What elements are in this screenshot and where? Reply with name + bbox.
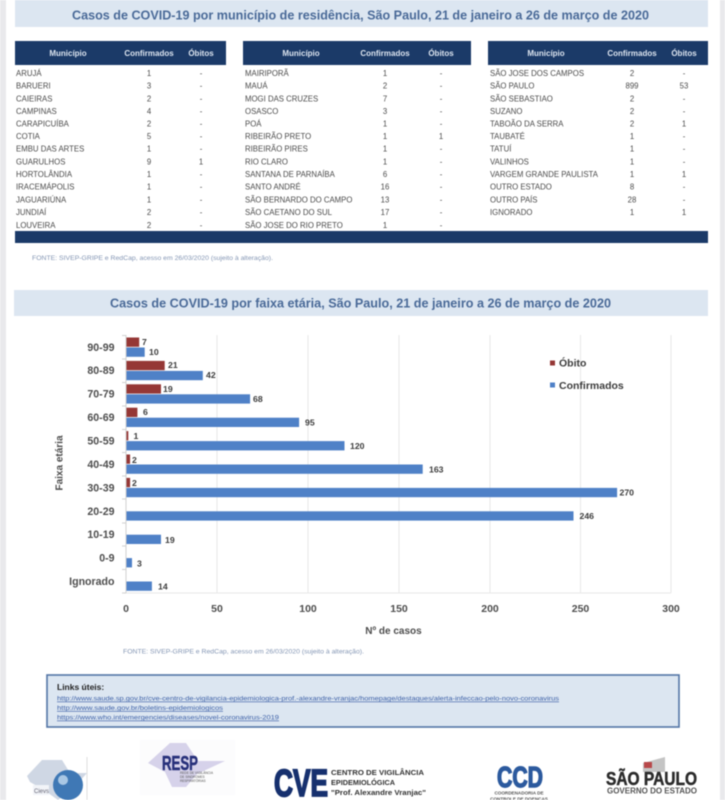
age group labels: 20-29	[87, 506, 115, 518]
table column 2: -	[440, 196, 443, 204]
heading: cases by age group	[14, 290, 708, 316]
table column 2: SÃO BERNARDO DO CAMPO	[245, 196, 352, 204]
table column 3: Confirmados	[607, 49, 657, 58]
table column 2: Confirmados	[360, 49, 410, 58]
table column 1: -	[200, 132, 203, 141]
table column 2: 2	[383, 82, 387, 90]
table column 1: -	[200, 170, 203, 179]
logo: CVE: "Prof. Alexandre Vranjac"	[331, 788, 426, 797]
table column 3: 2	[630, 69, 634, 78]
table column 1: -	[200, 221, 203, 230]
table column 1: 9	[147, 158, 151, 166]
table column 1: Confirmados	[124, 49, 174, 58]
data labels: 68	[253, 394, 263, 404]
bars: Óbito	[126, 338, 165, 487]
table column 2: RIBEIRÃO PIRES	[245, 144, 308, 154]
table column 3: VALINHOS	[490, 158, 529, 166]
table column 2: RIBEIRÃO PRETO	[245, 132, 311, 141]
table column 1: -	[200, 69, 203, 78]
table column 1: -	[200, 82, 203, 90]
bars: Confirmados	[126, 348, 617, 591]
table column 3	[488, 41, 708, 217]
table column 2: -	[440, 182, 443, 192]
table column 2: MOGI DAS CRUZES	[245, 94, 318, 104]
table column 1: -	[200, 107, 203, 116]
table column 1: IRACEMÁPOLIS	[16, 182, 74, 192]
logo: CCD	[490, 762, 548, 800]
table column 2: -	[440, 94, 443, 104]
table column 3: -	[683, 144, 686, 154]
table column 3: TABOÃO DA SERRA	[490, 120, 564, 128]
logo: Governo de São Paulo	[606, 757, 697, 796]
table column 3: VARGEM GRANDE PAULISTA	[490, 170, 599, 179]
link list: http://www.saude.sp.gov.br/cve-centro-de-vigilancia-epidemiologica-prof.-alexandre-vranjac/homepage/destaques/alerta-infeccao-pelo-novo-coronavirus	[57, 696, 559, 702]
data labels: 14	[158, 582, 168, 592]
table column 2: RIO CLARO	[245, 158, 288, 166]
table column 1: 1	[147, 170, 151, 179]
table column 1: 2	[147, 120, 151, 128]
logo: RESP: RESP	[162, 753, 198, 775]
table column 2: 1	[383, 144, 387, 154]
table column 1: 2	[147, 221, 151, 230]
source note: table: FONTE: SIVEP-GRIPE e RedCap, acesso em 26/03/2020 (sujeito à alteração).	[32, 256, 273, 262]
table column 2: SÃO JOSE DO RIO PRETO	[245, 221, 343, 230]
table column 1	[15, 41, 226, 230]
table column 3: 2	[630, 120, 634, 128]
table column 1: CARAPICUÍBA	[16, 120, 70, 128]
table column 2: 1	[383, 221, 387, 230]
table column 2: 1	[383, 158, 387, 166]
data labels: 7	[142, 337, 147, 347]
link list: http://www.saude.gov.br/boletins-epidemiologicos	[57, 705, 223, 712]
table column 2: -	[440, 158, 443, 166]
age group labels: 40-49	[87, 459, 115, 471]
table column 3: 1	[682, 120, 686, 128]
table column 3: 1	[682, 170, 686, 179]
age group labels	[69, 342, 115, 588]
table column 2: Município	[282, 49, 320, 58]
table column 2: MAIRIPORÃ	[245, 69, 290, 78]
age group labels: 80-89	[87, 365, 115, 377]
table column 1: 2	[147, 208, 151, 217]
table column 3: -	[683, 132, 686, 141]
table column 2: 7	[383, 94, 387, 104]
table column 1: GUARULHOS	[16, 158, 65, 166]
links heading: Links úteis:	[57, 682, 104, 692]
data labels: 19	[163, 384, 173, 394]
data labels: 3	[137, 558, 142, 568]
table column 2: 1	[383, 120, 387, 128]
table column 2: 13	[381, 196, 389, 204]
table column 3: -	[683, 182, 686, 192]
table column 3: 2	[630, 107, 634, 116]
data labels: 270	[620, 488, 634, 498]
table column 3: Município	[527, 49, 565, 58]
logo row	[27, 740, 697, 800]
link list: https://www.who.int/emergencies/diseases/novel-coronavirus-2019	[57, 714, 280, 722]
table column 3: 1	[630, 132, 634, 141]
bar chart	[54, 335, 680, 637]
logo: CVE: CENTRO DE VIGILÂNCIA	[331, 768, 425, 777]
logo: RESP: REDE DE VIGILÂNCIA	[180, 771, 214, 775]
table column 1: JUNDIAÍ	[16, 208, 47, 217]
table column 2: 3	[383, 107, 387, 116]
table column 2: 6	[383, 170, 387, 179]
table column 3: 899	[625, 82, 639, 90]
table column 1: COTIA	[16, 132, 41, 141]
heading: cases by age group: Casos de COVID-19 por faixa etária, São Paulo, 21 de janeiro a 26 de março de 2020	[110, 296, 611, 310]
age group labels: 0-9	[99, 552, 115, 564]
source note: chart: FONTE: SIVEP-GRIPE e RedCap, acesso em 26/03/2020 (sujeito à alteração).	[123, 650, 364, 656]
heading: cases by municipality: Casos de COVID-19 por município de residência, São Paulo, 21 de janeiro a 26 de março de 2020	[72, 8, 649, 22]
data labels: 95	[305, 418, 315, 428]
data labels: 21	[168, 360, 178, 370]
panel: age group chart section	[14, 290, 708, 656]
legend: Confirmados	[559, 380, 624, 392]
table column 1: -	[200, 120, 203, 128]
table column 1: -	[200, 94, 203, 104]
x axis tick labels: 300	[662, 603, 680, 615]
logo: Governo de São Paulo: GOVERNO DO ESTADO	[607, 786, 697, 796]
table column 1: 3	[147, 82, 151, 90]
link list	[57, 696, 559, 722]
x axis tick labels: 100	[299, 603, 317, 615]
table column 2: MAUÁ	[245, 82, 268, 90]
table column 2: -	[440, 82, 443, 90]
data labels: 6	[143, 407, 148, 417]
table column 2	[243, 41, 471, 230]
table column 1: 1	[147, 144, 151, 154]
table column 1: HORTOLÂNDIA	[16, 170, 73, 179]
x axis tick labels: 150	[390, 603, 408, 615]
table column 1: 1	[199, 158, 203, 166]
x axis tick labels: 0	[123, 603, 129, 615]
logo: CCD: CCD	[497, 762, 543, 794]
table column 2: -	[440, 120, 443, 128]
y axis title: Faixa etária	[54, 435, 66, 491]
table column 3: OUTRO PAÍS	[490, 196, 538, 204]
table column 3: 1	[682, 208, 686, 217]
table column 2: -	[440, 69, 443, 78]
age group labels: Ignorado	[69, 576, 115, 588]
heading: cases by municipality	[15, 0, 708, 27]
table column 1: 5	[147, 132, 152, 141]
table column 3: TAUBATÉ	[490, 132, 525, 141]
table column 3: 28	[628, 196, 636, 204]
table column 3: 1	[630, 144, 634, 154]
data labels: 10	[149, 347, 159, 357]
table column 2: SÃO CAETANO DO SUL	[245, 208, 333, 217]
data labels: 2	[132, 478, 137, 488]
table column 3: SÃO JOSE DOS CAMPOS	[490, 69, 584, 78]
table column 1: CAMPINAS	[16, 107, 57, 116]
data labels: 246	[580, 511, 594, 521]
table column 3: 53	[680, 82, 688, 90]
table footer bar	[15, 231, 708, 243]
table column 2: SANTANA DE PARNAÍBA	[245, 170, 336, 179]
logo: RESP: DE SINDROMES	[180, 775, 205, 779]
table column 1: EMBU DAS ARTES	[16, 144, 84, 154]
table column 2: 1	[439, 132, 443, 141]
legend	[550, 356, 624, 392]
age group labels: 50-59	[87, 436, 115, 448]
table column 3: SUZANO	[490, 107, 522, 116]
logo: CCD: COORDENADORIA DE	[494, 790, 544, 796]
table column 1: -	[200, 182, 203, 192]
data labels: 163	[429, 464, 444, 474]
data labels: 120	[350, 441, 365, 451]
data labels: 19	[165, 535, 175, 545]
table column 3: 2	[630, 94, 634, 104]
table column 1: -	[200, 208, 203, 217]
table column 2: Óbitos	[428, 49, 454, 58]
table column 1: 2	[147, 94, 151, 104]
age group labels: 60-69	[87, 412, 115, 424]
table column 3: OUTRO ESTADO	[490, 182, 552, 192]
table column 1: ARUJÁ	[16, 69, 42, 78]
table column 1: -	[200, 196, 203, 204]
logo: RESP	[140, 740, 235, 795]
table column 3: SÃO SEBASTIAO	[490, 94, 553, 104]
age group labels: 90-99	[87, 342, 115, 354]
table column 1: 1	[147, 69, 151, 78]
table column 3: 1	[630, 208, 634, 217]
table column 3: 1	[630, 158, 634, 166]
x axis tick labels: 50	[211, 603, 223, 615]
logo: CVE	[274, 763, 426, 800]
table column 2: -	[440, 107, 443, 116]
table column 2: POÁ	[245, 120, 262, 128]
table column 1: Município	[49, 49, 87, 58]
data labels: 1	[134, 431, 138, 441]
table column 3: -	[683, 196, 686, 204]
table column 2: -	[440, 170, 443, 179]
table column 1: 4	[147, 107, 152, 116]
age group labels: 10-19	[87, 529, 115, 541]
panel: municipality table section	[15, 0, 708, 262]
table column 1: Óbitos	[188, 49, 214, 58]
logo: RESP: RESPIRATÓRIAS	[180, 778, 206, 783]
age group labels: 70-79	[87, 388, 115, 400]
table column 1: 1	[147, 196, 151, 204]
table column 2: -	[440, 208, 443, 217]
table column 3: 1	[630, 170, 634, 179]
table column 1: JAGUARIÚNA	[16, 196, 67, 204]
logo: CVE: EPIDEMIOLÓGICA	[331, 778, 396, 787]
panel: useful links	[47, 675, 679, 727]
x axis tick labels: 200	[481, 603, 499, 615]
table column 3: -	[683, 69, 686, 78]
data labels	[132, 337, 634, 592]
table column 1: LOUVEIRA	[16, 221, 56, 230]
table column 1: BARUERI	[16, 82, 51, 90]
table column 2: 1	[383, 69, 387, 78]
table column 3: TATUÍ	[490, 144, 512, 154]
table column 2: -	[440, 221, 443, 230]
data labels: 42	[206, 370, 216, 380]
logo: map and globe	[27, 757, 87, 800]
table column 3: -	[683, 158, 686, 166]
x axis tick labels: 250	[572, 603, 589, 615]
table column 3: SÃO PAULO	[490, 82, 534, 90]
x axis tick labels	[123, 603, 680, 615]
table column 2: SANTO ANDRÉ	[245, 182, 301, 192]
logo: Governo de São Paulo: SÃO PAULO	[606, 768, 697, 789]
table column 3: 8	[630, 182, 634, 192]
table column 2: -	[440, 144, 443, 154]
table column 2: 17	[381, 208, 389, 217]
table column 2: OSASCO	[245, 107, 278, 116]
table column 1: CAIEIRAS	[16, 94, 52, 104]
table column 3: -	[683, 107, 686, 116]
table column 2: 1	[383, 132, 387, 141]
table column 2: 16	[381, 182, 389, 192]
data labels: 2	[132, 455, 137, 465]
age group labels: 30-39	[87, 482, 115, 494]
logo: map and globe: Cievs	[34, 789, 49, 795]
x axis title: Nº de casos	[365, 626, 422, 637]
table column 1: 1	[147, 182, 151, 192]
table column 3: IGNORADO	[490, 208, 532, 217]
legend: Óbito	[559, 356, 586, 370]
table column 3: -	[683, 94, 686, 104]
table column 3: Óbitos	[671, 49, 697, 58]
table column 1: -	[200, 144, 203, 154]
